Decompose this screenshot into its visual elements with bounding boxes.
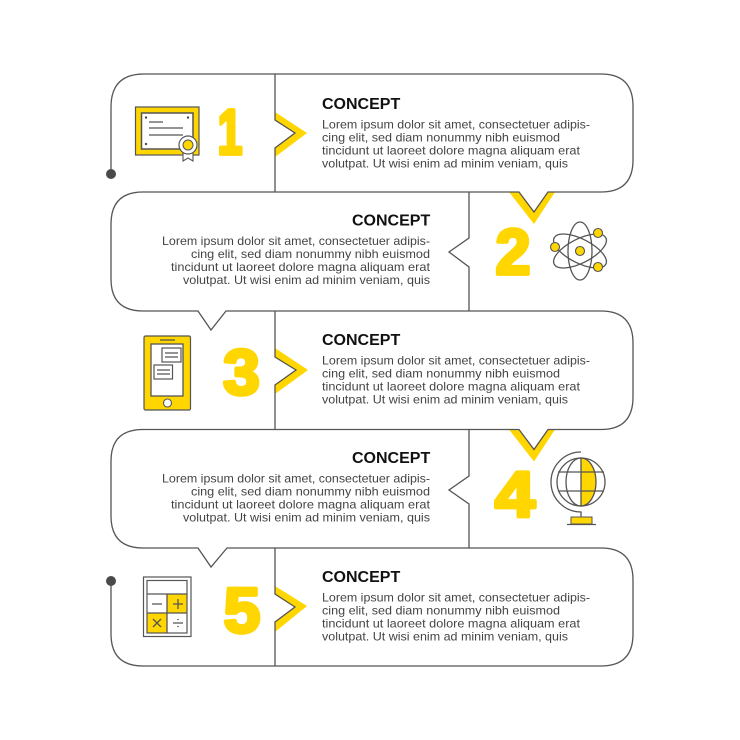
step 2 <box>162 212 611 288</box>
icon: globe <box>551 452 605 524</box>
body text 4: Lorem ipsum dolor sit amet, consectetuer adipis- <box>162 472 430 486</box>
body text 3: cing elit, sed diam nonummy nibh euismod <box>322 366 560 380</box>
body text 5: tincidunt ut laoreet dolore magna aliquam erat <box>322 616 581 630</box>
heading 1: CONCEPT <box>322 96 400 113</box>
step 3 <box>144 332 590 410</box>
body text 3: tincidunt ut laoreet dolore magna aliquam erat <box>322 380 581 394</box>
body text 4 <box>162 472 431 524</box>
body text 4: tincidunt ut laoreet dolore magna aliquam erat <box>171 498 431 512</box>
step 4 <box>162 450 605 531</box>
body text 5 <box>322 590 590 644</box>
body text 2: volutpat. Ut wisi enim ad minim veniam, quis <box>183 273 430 287</box>
body text 2: Lorem ipsum dolor sit amet, consectetuer adipis- <box>162 234 430 248</box>
heading 5: CONCEPT <box>322 569 400 586</box>
body text 1: tincidunt ut laoreet dolore magna aliquam erat <box>322 144 581 158</box>
body text 4: cing elit, sed diam nonummy nibh euismod <box>191 484 430 498</box>
body text 1: Lorem ipsum dolor sit amet, consectetuer adipis- <box>322 118 590 132</box>
body text 1 <box>322 118 590 170</box>
icon: calculator <box>144 577 191 636</box>
heading 4: CONCEPT <box>352 450 430 467</box>
body text 3 <box>322 354 590 406</box>
flowing outline <box>111 74 633 666</box>
body text 5: Lorem ipsum dolor sit amet, consectetuer adipis- <box>322 590 590 604</box>
heading 2: CONCEPT <box>352 212 430 230</box>
body text 1: volutpat. Ut wisi enim ad minim veniam, quis <box>322 156 568 170</box>
icon: atom <box>549 222 611 280</box>
body text 5: volutpat. Ut wisi enim ad minim veniam, quis <box>322 630 568 644</box>
heading 3: CONCEPT <box>322 332 400 349</box>
number 3: 3 <box>223 337 260 408</box>
start dot <box>106 169 116 179</box>
body text 3: volutpat. Ut wisi enim ad minim veniam, quis <box>322 392 568 406</box>
number 5: 5 <box>224 575 260 646</box>
body text 3: Lorem ipsum dolor sit amet, consectetuer adipis- <box>322 354 590 368</box>
body text 2: tincidunt ut laoreet dolore magna aliquam erat <box>171 260 431 274</box>
yellow chevrons <box>275 112 555 632</box>
icon: certificate <box>136 107 199 161</box>
body text 4: volutpat. Ut wisi enim ad minim veniam, quis <box>183 510 430 524</box>
icon: smartphone <box>144 336 190 410</box>
step 5 <box>144 569 590 646</box>
number 4: 4 <box>495 460 535 531</box>
body text 1: cing elit, sed diam nonummy nibh euismod <box>322 130 560 144</box>
body text 2: cing elit, sed diam nonummy nibh euismod <box>191 247 430 261</box>
end dot <box>106 576 116 586</box>
body text 5: cing elit, sed diam nonummy nibh euismod <box>322 604 560 618</box>
body text 2 <box>162 234 431 287</box>
step 1 <box>136 96 590 170</box>
number 1: 1 <box>217 96 243 168</box>
number 2: 2 <box>495 218 531 288</box>
